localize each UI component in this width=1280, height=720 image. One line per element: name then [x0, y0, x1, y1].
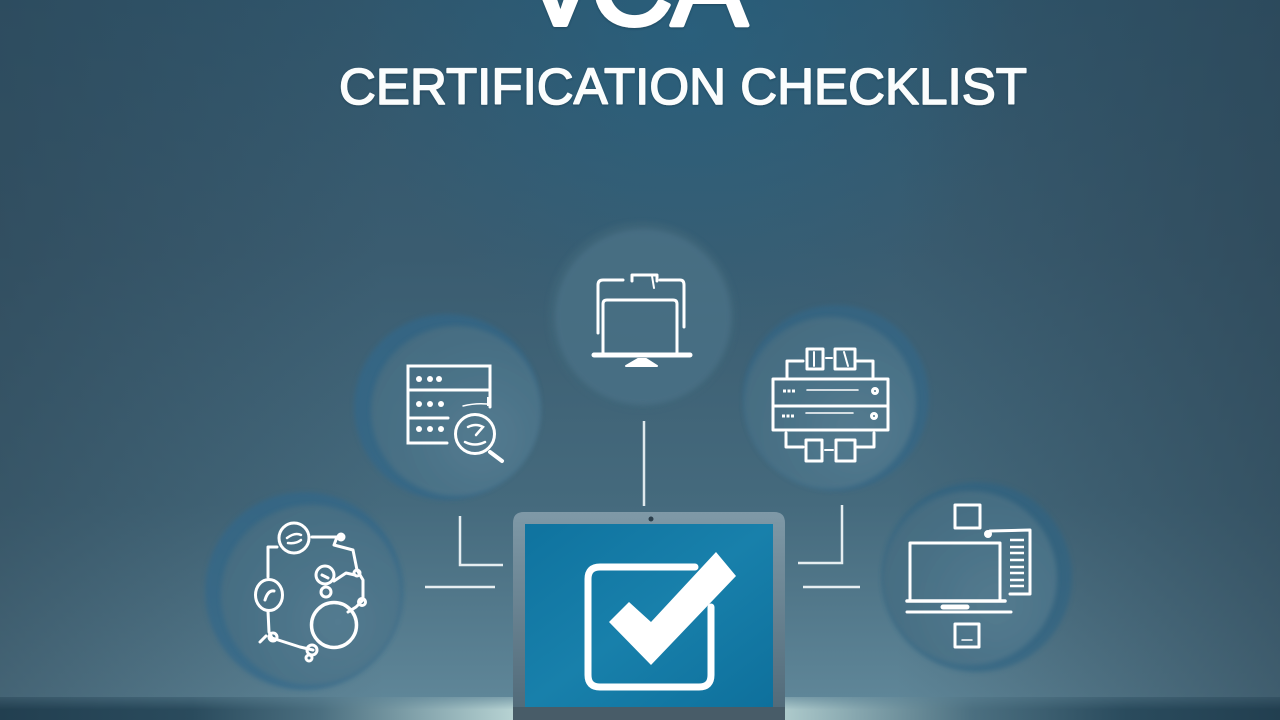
disc: server search — [354, 314, 541, 500]
disc: laptop with modules — [882, 482, 1072, 672]
subtitle: certification checklist: CERTIFICATION CHECKLIST — [339, 58, 1027, 115]
disc: top monitor — [548, 222, 736, 410]
laptop screen — [525, 524, 773, 707]
connector: top disc to laptop — [643, 421, 645, 506]
disc: network nodes — [205, 492, 403, 690]
connector: network disc line — [425, 586, 495, 588]
central laptop — [513, 512, 785, 720]
checkbox outline — [588, 567, 711, 687]
connector: right laptop line — [803, 586, 860, 588]
connector: right server elbow — [798, 505, 842, 563]
webcam — [648, 516, 654, 522]
icon: node cycle — [256, 523, 366, 661]
icon: monitor with bracket — [594, 275, 690, 366]
connector: server disc elbow — [460, 516, 503, 565]
icon: server rack with magnifier — [408, 366, 502, 461]
icon: server rack with connected modules — [773, 349, 888, 461]
check mark — [609, 552, 736, 665]
disc: server with modules — [743, 305, 929, 491]
icon: laptop with peripherals — [907, 505, 1030, 647]
